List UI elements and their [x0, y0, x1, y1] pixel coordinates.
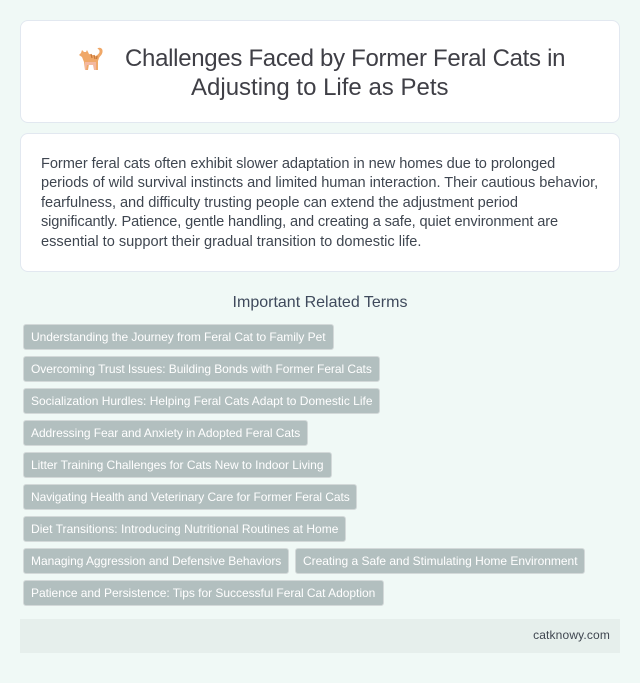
tag 10	[23, 580, 384, 606]
tag 6: Navigating Health and Veterinary Care for Former Feral Cats	[31, 490, 350, 504]
footer: catknowy.com	[533, 628, 610, 642]
tag 1	[23, 324, 334, 350]
title: Adjusting to Life as Pets	[191, 74, 448, 101]
title: Challenges Faced by Former Feral Cats in	[125, 45, 565, 72]
header card	[20, 20, 620, 123]
icon: cat	[79, 48, 103, 70]
tag 8	[23, 548, 289, 574]
tag 9	[295, 548, 585, 574]
footer	[20, 619, 620, 653]
tag 7	[23, 516, 346, 542]
description text	[41, 156, 598, 250]
tag 2: Overcoming Trust Issues: Building Bonds with Former Feral Cats	[31, 362, 372, 376]
tag 4: Addressing Fear and Anxiety in Adopted Feral Cats	[31, 426, 300, 440]
description text: significantly. Patience, gentle handling, and creating a safe, quiet environment are	[41, 214, 558, 230]
tag 2	[23, 356, 380, 382]
description text: fearfulness, and difficulty trusting people can extend the adjustment period	[41, 195, 518, 211]
tag 4	[23, 420, 308, 446]
tag 5: Litter Training Challenges for Cats New to Indoor Living	[31, 458, 323, 472]
title	[125, 45, 565, 101]
tag 1: Understanding the Journey from Feral Cat to Family Pet	[31, 330, 326, 344]
description text: Former feral cats often exhibit slower adaptation in new homes due to prolonged	[41, 156, 555, 172]
related term tags	[23, 324, 585, 606]
tag 8: Managing Aggression and Defensive Behaviors	[31, 554, 281, 568]
tag 3: Socialization Hurdles: Helping Feral Cats Adapt to Domestic Life	[31, 394, 372, 408]
tag 3	[23, 388, 380, 414]
tag 10: Patience and Persistence: Tips for Successful Feral Cat Adoption	[31, 586, 375, 600]
tag 5	[23, 452, 332, 478]
tag 7: Diet Transitions: Introducing Nutritional Routines at Home	[31, 522, 339, 536]
tag 6	[23, 484, 357, 510]
description text: periods of wild survival instincts and limited human interaction. Their cautious behavior,	[41, 175, 598, 191]
panel: description	[20, 133, 620, 272]
description text: essential to support their gradual transition to domestic life.	[41, 234, 421, 250]
heading: related terms: Important Related Terms	[233, 294, 407, 311]
tag 9: Creating a Safe and Stimulating Home Environment	[303, 554, 578, 568]
